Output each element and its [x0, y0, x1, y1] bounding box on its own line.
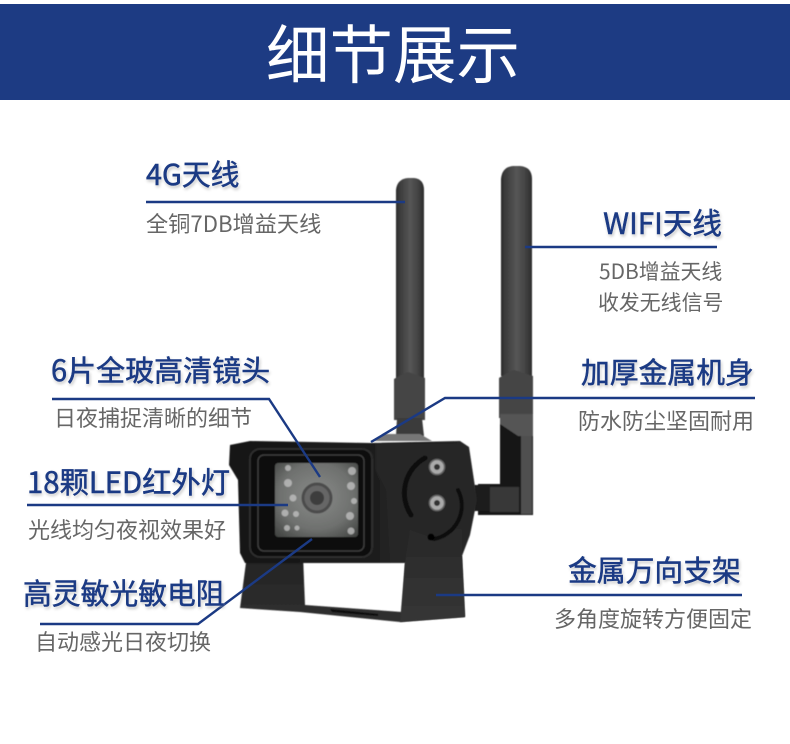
header banner — [0, 4, 790, 100]
description: 日夜捕捉清晰的细节 — [54, 401, 252, 433]
heading: WIFI天线 — [603, 200, 722, 243]
description: 5DB增益天线 — [599, 256, 722, 286]
callout: metal bracket — [554, 549, 752, 634]
description line 2: 收发无线信号 — [598, 287, 723, 317]
camera lens glass — [275, 463, 358, 537]
callout: 4G antenna — [146, 153, 321, 239]
description: 多角度旋转方便固定 — [554, 602, 752, 634]
description: 光线均匀夜视效果好 — [28, 513, 226, 545]
description: 全铜7DB增益天线 — [146, 207, 321, 239]
callout: lens — [51, 348, 270, 433]
callout: thick metal body — [578, 351, 754, 436]
heading: 6片全玻高清镜头 — [51, 348, 270, 390]
icon: right antenna — [474, 166, 533, 515]
infrared LEDs — [282, 465, 357, 534]
callout: photoresistor — [23, 572, 226, 657]
title: 细节展示 — [266, 5, 520, 97]
description: 防水防尘坚固耐用 — [578, 404, 754, 436]
callout lines — [27, 202, 755, 624]
screws — [430, 460, 444, 474]
heading: 高灵敏光敏电阻 — [23, 572, 225, 613]
icon: left antenna — [372, 178, 432, 441]
callout: infrared LEDs — [27, 460, 231, 545]
icon: camera body — [229, 441, 477, 622]
heading: 加厚金属机身 — [581, 351, 754, 392]
callout: WIFI antenna — [598, 200, 724, 317]
heading: 金属万向支架 — [568, 549, 741, 590]
rotating disc — [389, 456, 471, 538]
description: 自动感光日夜切换 — [35, 625, 211, 657]
heading: 4G天线 — [146, 153, 239, 194]
heading: 18颗LED红外灯 — [27, 460, 230, 502]
camera window frame — [250, 449, 372, 557]
icon: camera bracket — [240, 530, 465, 622]
